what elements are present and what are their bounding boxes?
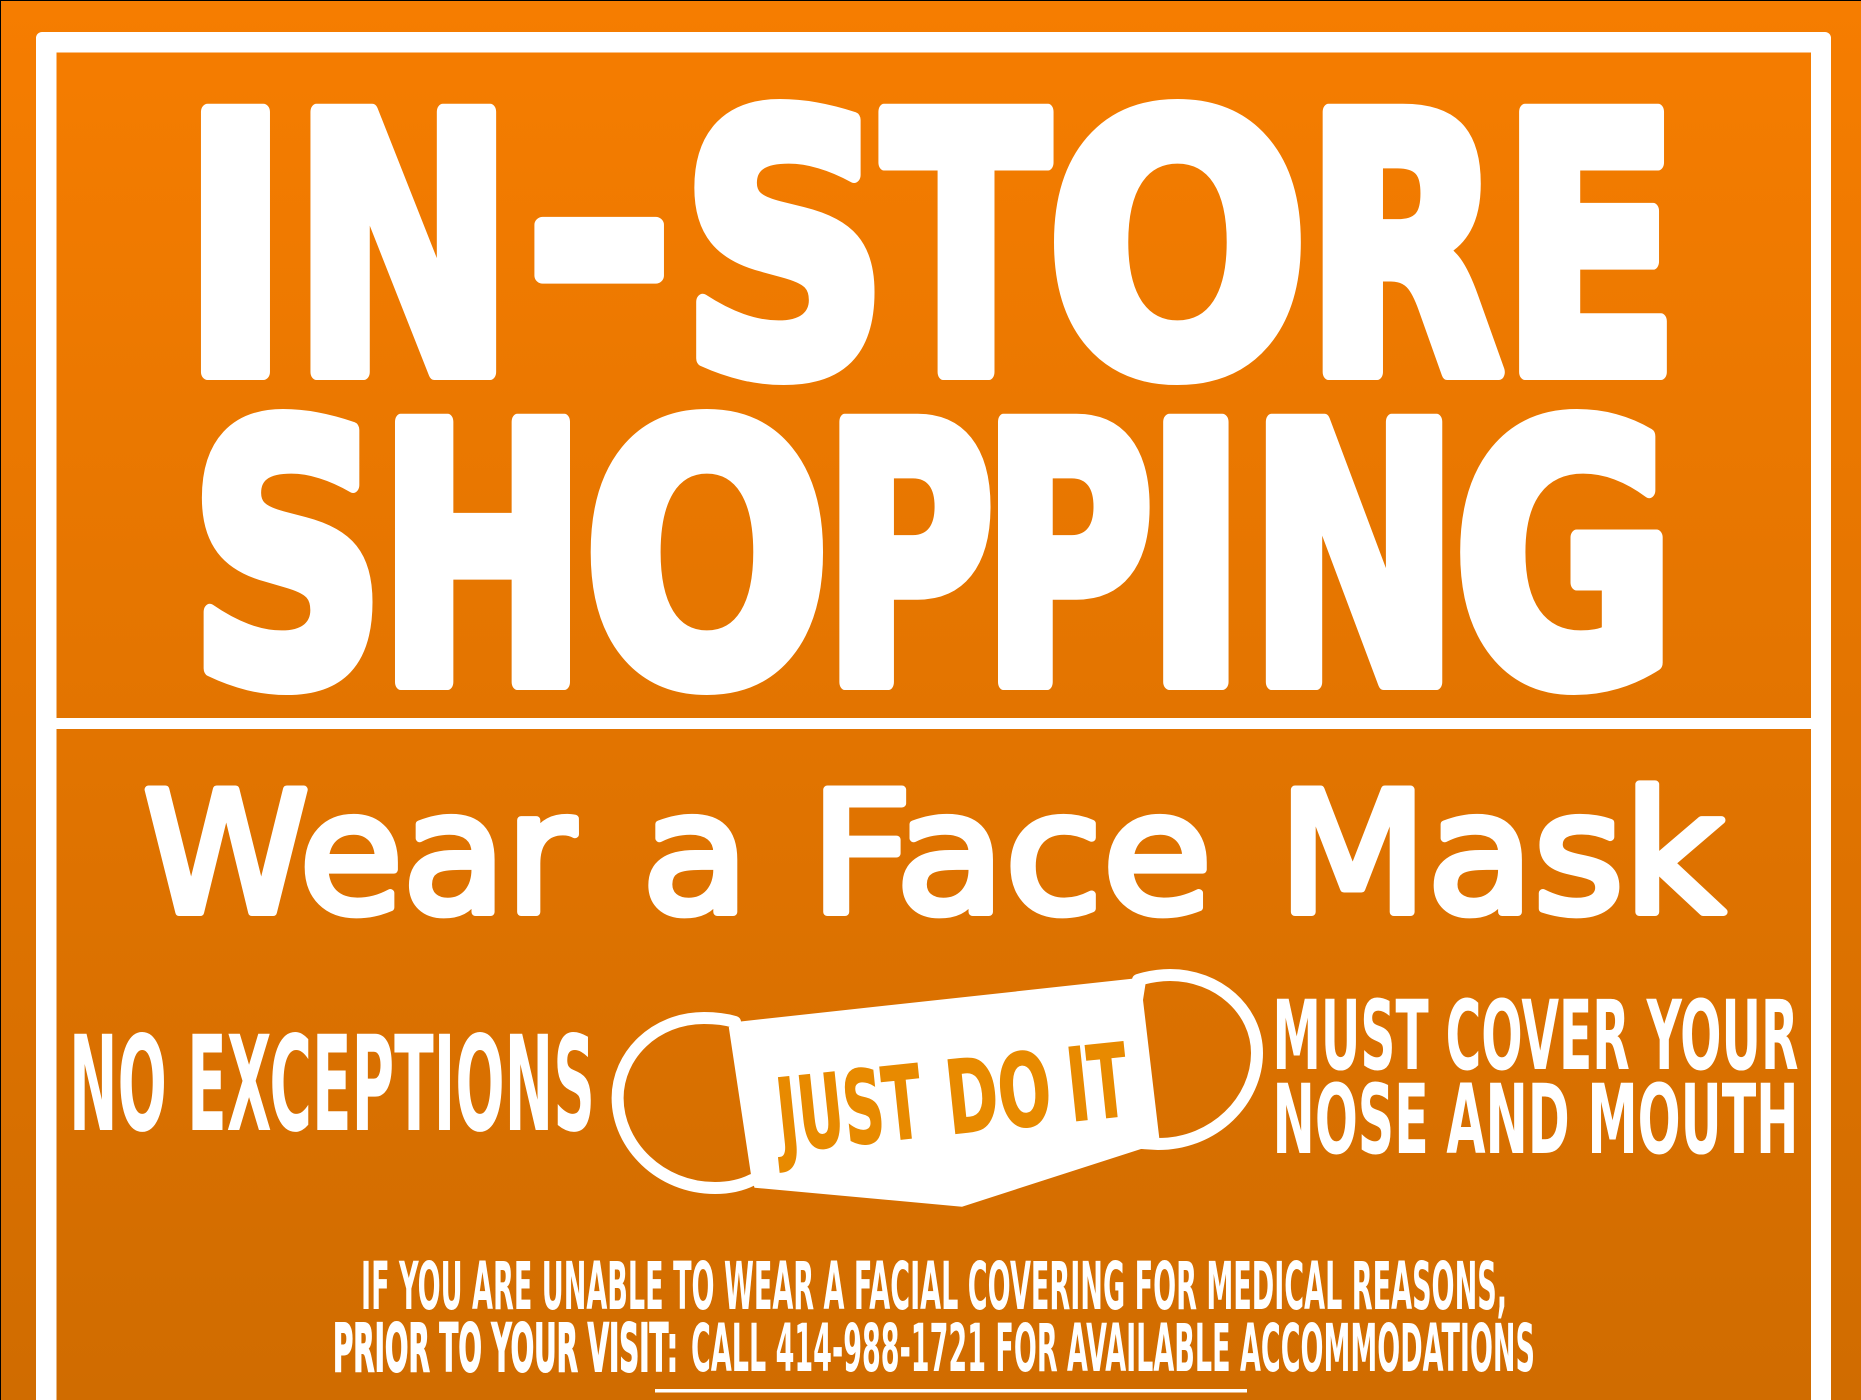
mask text: JUST DO IT: JUST: [768, 1043, 928, 1176]
subtitle: Wear a Face Mask: a: [642, 756, 749, 952]
title: [180, 23, 1680, 767]
title line: IN-STORE: E: [1501, 42, 1680, 457]
left ear loop: [618, 1018, 752, 1188]
title line: IN-STORE: N: [292, 42, 515, 457]
title line: SHOPPING: H: [378, 352, 587, 767]
title line: SHOPPING: N: [1248, 352, 1460, 767]
title line: SHOPPING: G: [1453, 352, 1677, 767]
title line: SHOPPING: O: [583, 352, 831, 767]
title line: IN-STORE: I: [180, 42, 291, 457]
title line: IN-STORE: O: [1046, 42, 1310, 457]
title line: SHOPPING: P: [823, 352, 995, 767]
mask text: JUST DO IT: IT: [1062, 1021, 1134, 1145]
mask body: [729, 978, 1159, 1207]
title line: SHOPPING: I: [1144, 352, 1248, 767]
title line: IN-STORE: S: [680, 42, 889, 457]
medical note: [333, 1248, 1535, 1387]
subtitle: Wear a Face Mask: Mask: [1278, 756, 1724, 952]
face mask illustration: [618, 975, 1257, 1207]
subtitle: Wear a Face Mask: Face: [810, 756, 1212, 952]
title line: IN-STORE: T: [883, 42, 1051, 457]
title line: IN-STORE: R: [1305, 42, 1504, 457]
title line: SHOPPING: P: [982, 352, 1154, 767]
right ear loop: [1138, 975, 1257, 1144]
title line: IN-STORE: -: [523, 23, 676, 438]
subtitle: Wear a Face Mask: Wear: [143, 756, 576, 952]
note line 2: PRIOR TO YOUR VISIT:: [333, 1310, 678, 1387]
divider: [56, 718, 1812, 729]
right text block: [1272, 980, 1798, 1176]
text: NO EXCEPTIONS: [69, 1008, 595, 1162]
title line: SHOPPING: S: [188, 352, 386, 767]
underline: [655, 1389, 1247, 1392]
mask text: JUST DO IT: DO: [940, 1029, 1057, 1158]
